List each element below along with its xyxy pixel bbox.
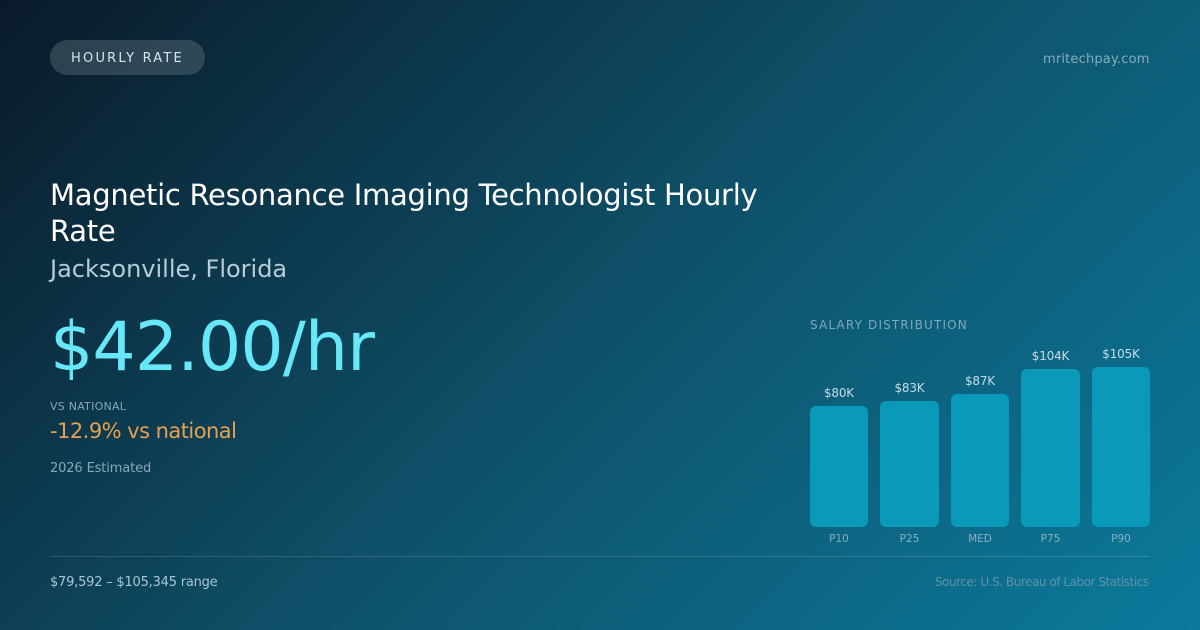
site domain: mritechpay.com — [1043, 52, 1150, 67]
title — [50, 178, 757, 248]
chart: salary distribution — [810, 318, 1150, 545]
bar P25: P25 — [900, 533, 919, 545]
title: Magnetic Resonance Imaging Technologist Hourly — [50, 178, 757, 212]
title: Rate — [50, 214, 115, 248]
badge: hourly rate: HOURLY RATE — [71, 51, 184, 66]
bar P25 — [880, 381, 939, 545]
chart heading: SALARY DISTRIBUTION — [810, 318, 968, 332]
headline hourly rate: $42.00/hr — [50, 308, 374, 387]
bar P25: $83K — [894, 381, 924, 395]
bar P75 — [1021, 349, 1080, 545]
source note: Source: U.S. Bureau of Labor Statistics — [935, 575, 1149, 589]
bar P10 — [810, 386, 868, 545]
bar P90: P90 — [1111, 533, 1131, 545]
salary range: $79,592 – $105,345 range — [50, 575, 217, 590]
bar P75: P75 — [1041, 533, 1060, 545]
bar MED: MED — [968, 533, 992, 545]
bar P10: P10 — [829, 533, 849, 545]
estimate year note: 2026 Estimated — [50, 461, 151, 476]
bar MED: $87K — [965, 374, 995, 388]
bar P90: $105K — [1102, 347, 1140, 361]
subtitle: location: Jacksonville, Florida — [50, 255, 287, 283]
bar MED — [951, 374, 1009, 545]
bar P90 — [1092, 347, 1150, 545]
bar P75: $104K — [1032, 349, 1069, 363]
badge: hourly rate — [50, 40, 205, 75]
label: vs national: VS NATIONAL — [50, 400, 126, 413]
comparison value: -12.9% vs national — [50, 419, 236, 443]
bar P10: $80K — [824, 386, 854, 400]
